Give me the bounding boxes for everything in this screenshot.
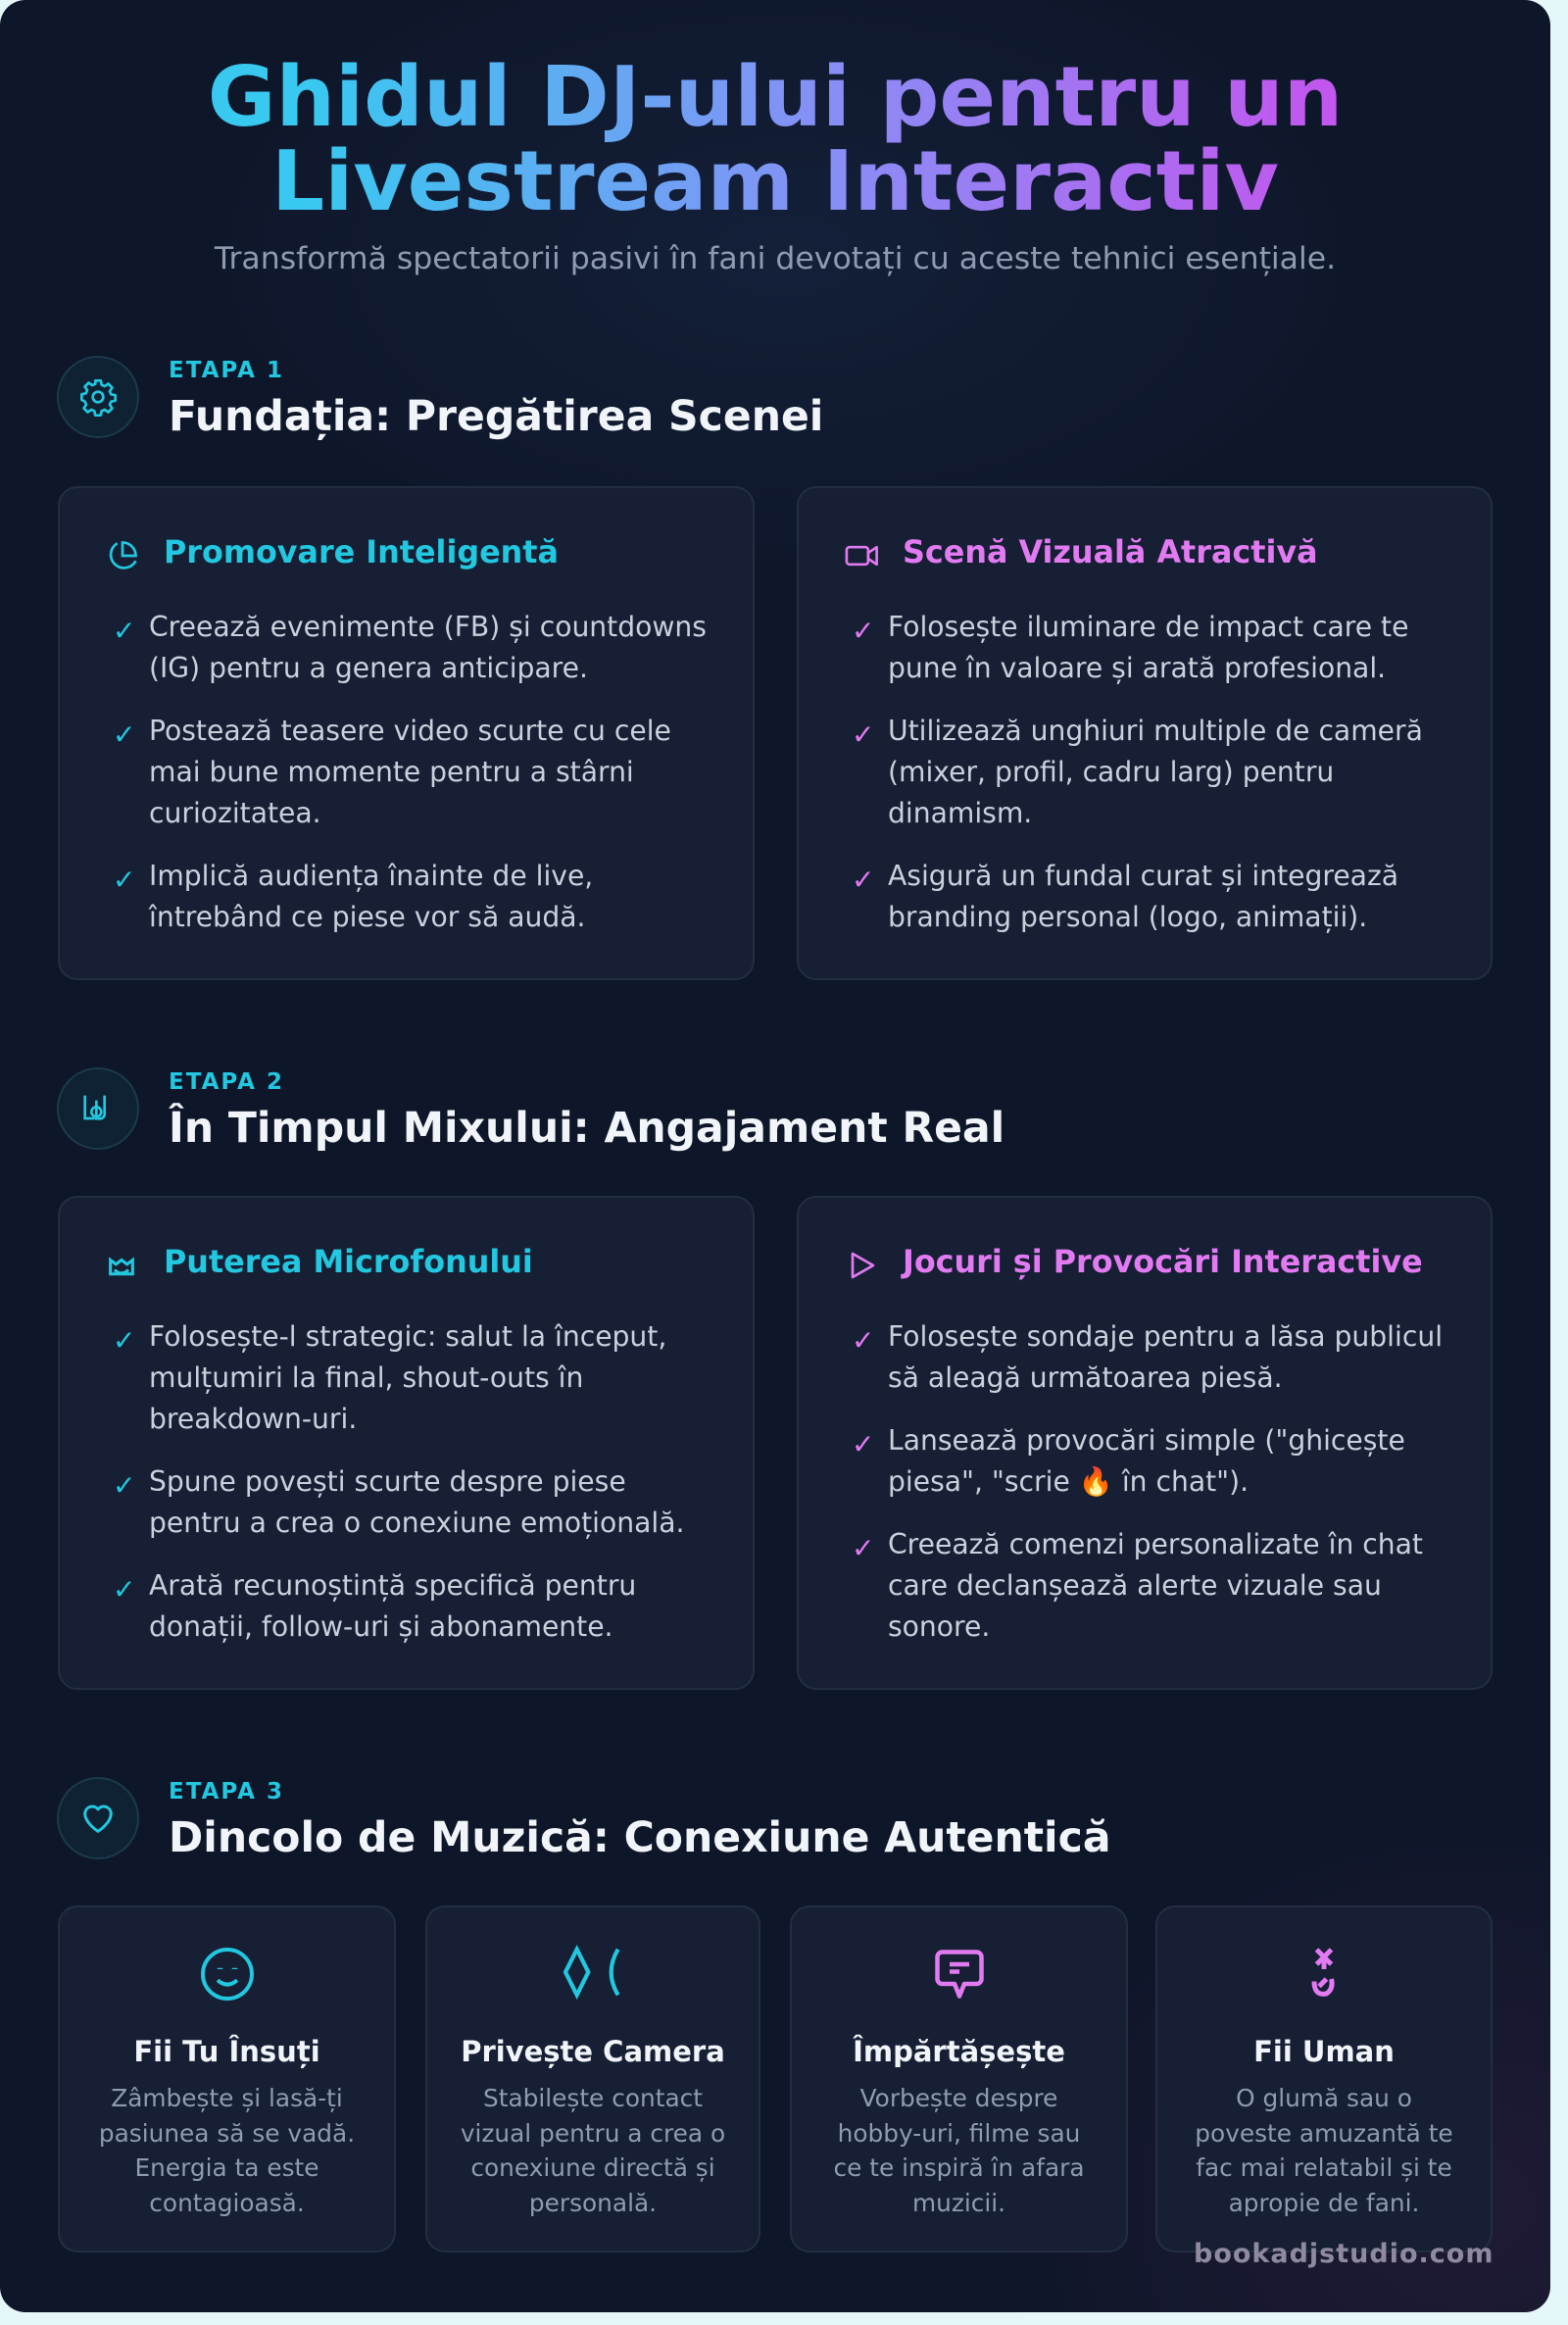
title xyxy=(0,56,1550,224)
bullet list: Utilizează unghiuri multiple de cameră (mixer, profil, cadru larg) pentru dinamism. xyxy=(888,715,1423,829)
title: Ghidul DJ-ului pentru un xyxy=(208,49,1343,146)
bullet list xyxy=(117,611,707,933)
panel: impartaseste xyxy=(790,1905,1128,2252)
card title: Promovare Inteligentă xyxy=(164,534,559,570)
panel: puterea microfonului xyxy=(58,1196,755,1690)
icon: pie chart xyxy=(110,541,137,569)
panel: priveste camera xyxy=(425,1905,760,2252)
bullet list xyxy=(856,1320,1443,1643)
description: Vorbește despre hobby-uri, filme sau ce te inspiră în afara muzicii. xyxy=(833,2084,1085,2217)
bullet list: Folosește iluminare de impact care te pune în valoare și arată profesional. xyxy=(888,611,1408,684)
card title: Jocuri și Provocări Interactive xyxy=(903,1244,1423,1280)
bullet list: Lansează provocări simple ("ghicește piesa", "scrie 🔥 în chat"). xyxy=(888,1424,1405,1498)
panel: fii tu insuti xyxy=(58,1905,396,2252)
panel: scena vizuala atractiva xyxy=(797,486,1493,980)
card title: Puterea Microfonului xyxy=(164,1244,533,1280)
icon: mixer xyxy=(57,1067,139,1150)
description: O glumă sau o poveste amuzantă te fac mai relatabil și te apropie de fani. xyxy=(1195,2084,1453,2217)
label: etapa 1: ETAPA 1 xyxy=(169,358,284,383)
stage 3 header xyxy=(57,1777,1111,1862)
panel: promovare inteligenta xyxy=(58,486,755,980)
bullet list xyxy=(856,611,1423,933)
card title: Împărtășește xyxy=(853,2035,1065,2068)
heading: stage 3: Dincolo de Muzică: Conexiune Autentică xyxy=(169,1814,1111,1862)
icon: play xyxy=(851,1253,874,1278)
icon: smiley xyxy=(201,1948,254,2001)
footer: website: bookadjstudio.com xyxy=(1194,2239,1494,2269)
stage 2 header xyxy=(57,1067,1004,1153)
heading: stage 1: Fundația: Pregătirea Scenei xyxy=(169,393,823,441)
stage 1 header xyxy=(57,356,823,441)
bullet list: Creează comenzi personalizate în chat care declanșează alerte vizuale sau sonore. xyxy=(888,1528,1423,1643)
icon: heart xyxy=(57,1777,139,1859)
bullet list: Spune povești scurte despre piese pentru a crea o conexiune emoțională. xyxy=(149,1465,684,1539)
icon: microphone xyxy=(109,1257,134,1276)
icon: video camera xyxy=(845,545,878,567)
icon: laugh xyxy=(1311,1948,1335,1997)
label: etapa 2: ETAPA 2 xyxy=(169,1069,284,1095)
panel: fii uman xyxy=(1155,1905,1493,2252)
bullet list: Asigură un fundal curat și integrează branding personal (logo, animații). xyxy=(888,860,1398,933)
card title: Privește Camera xyxy=(461,2035,725,2068)
heading: stage 2: În Timpul Mixului: Angajament Real xyxy=(169,1105,1004,1153)
description: Stabilește contact vizual pentru a crea o conexiune directă și personală. xyxy=(461,2084,725,2217)
bullet list: Arată recunoștință specifică pentru donații, follow-uri și abonamente. xyxy=(149,1569,636,1643)
card title: Fii Tu Însuți xyxy=(133,2035,320,2068)
label: etapa 3: ETAPA 3 xyxy=(169,1779,284,1805)
bullet list: Folosește sondaje pentru a lăsa publicul să aleagă următoarea piesă. xyxy=(888,1320,1443,1394)
card title: Scenă Vizuală Atractivă xyxy=(903,534,1318,570)
bullet list: Postează teasere video scurte cu cele mai bune momente pentru a stârni curiozitatea. xyxy=(149,715,671,829)
bullet list: Implică audiența înainte de live, întrebând ce piese vor să audă. xyxy=(149,860,593,933)
icon: gear xyxy=(57,356,139,438)
bullet list xyxy=(117,1320,684,1643)
title: Livestream Interactiv xyxy=(271,133,1279,230)
icon: eye contact xyxy=(563,1945,619,2000)
bullet list: Creează evenimente (FB) și countdowns (IG) pentru a genera anticipare. xyxy=(149,611,707,684)
description: Zâmbește și lasă-ți pasiunea să se vadă. Energia ta este contagioasă. xyxy=(99,2084,355,2217)
panel: jocuri si provocari xyxy=(797,1196,1493,1690)
card title: Fii Uman xyxy=(1253,2035,1395,2068)
bullet list: Folosește-l strategic: salut la început, mulțumiri la final, shout-outs în breakdown-uri. xyxy=(149,1320,666,1435)
subtitle: Transformă spectatorii pasivi în fani devotați cu aceste tehnici esențiale. xyxy=(215,241,1336,276)
icon: chat bubble xyxy=(935,1950,984,1999)
